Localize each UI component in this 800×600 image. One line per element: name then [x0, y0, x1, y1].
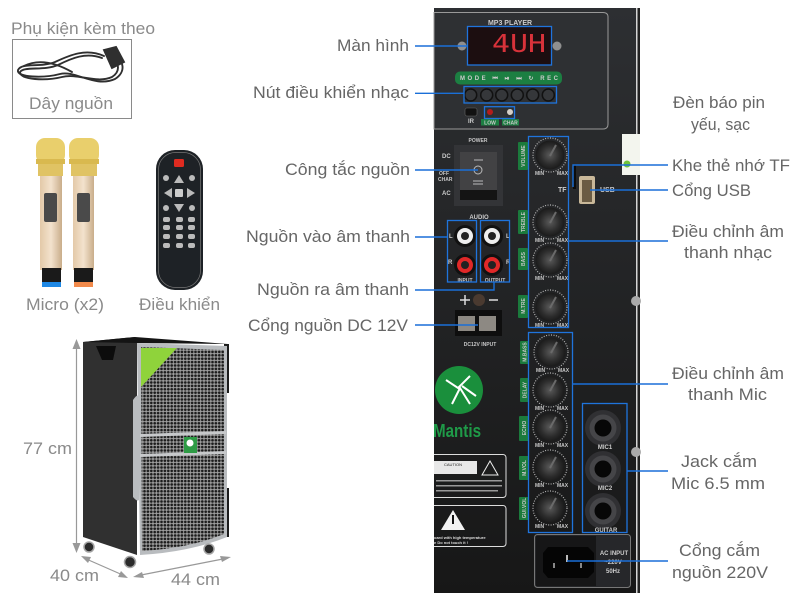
- dimension: width 44 cm: 44 cm: [171, 570, 220, 589]
- speaker front grille: [137, 343, 227, 555]
- AC input socket: [534, 534, 630, 588]
- audio jacks: INPUT: [458, 278, 472, 284]
- audio jacks: L: [506, 234, 510, 240]
- callout: audio input: Nguồn vào âm thanh: [246, 227, 410, 246]
- speaker front wings: [224, 344, 229, 537]
- audio jacks: AUDIO: [469, 215, 489, 221]
- callout: power switch: Công tắc nguồn: [285, 160, 410, 179]
- DC 12V terminal: [455, 294, 502, 348]
- LED display: 4UH: [492, 29, 546, 58]
- mode button legend: [455, 72, 562, 84]
- callout: music tone controls: Điều chỉnh âm: [672, 222, 784, 241]
- callout: mic tone controls: [572, 364, 784, 404]
- LED display: [468, 27, 551, 65]
- callout: 220V power socket: Cổng cắm: [679, 541, 760, 560]
- callout: mic tone controls: Điều chỉnh âm: [672, 364, 784, 383]
- label: microphones: Micro (x2): [26, 295, 104, 314]
- caution labels: oard with high temperature: [434, 535, 486, 540]
- power switch: AC: [442, 191, 451, 197]
- audio jacks: R: [506, 260, 511, 266]
- callout: music tone controls: [568, 222, 784, 262]
- callout: 220V power socket: nguồn 220V: [672, 563, 769, 582]
- green function tags: TREBLE: [521, 211, 527, 232]
- Mantis logo: Mantis: [433, 421, 481, 441]
- dimension: height 77 cm: 77 cm: [23, 439, 72, 458]
- green function tags: [518, 142, 529, 520]
- accessory box: power cord: Dây nguồn: [29, 94, 113, 113]
- callout: music tone controls: thanh nhạc: [684, 243, 773, 262]
- caution labels: CAUTION: [444, 462, 462, 467]
- callout: screen: [337, 36, 467, 55]
- callout: mic jacks: [627, 452, 765, 493]
- callout: screen: Màn hình: [337, 36, 409, 55]
- mic jacks: MIC2: [598, 486, 613, 492]
- audio jacks: R: [448, 260, 453, 266]
- caution labels: e Do not touch it !: [434, 540, 468, 545]
- callout: music buttons: Nút điều khiển nhạc: [253, 83, 410, 102]
- music buttons: [465, 89, 554, 101]
- power switch: OFF: [439, 171, 449, 177]
- callout: mic jacks: Mic 6.5 mm: [671, 474, 765, 493]
- music knobs: [533, 138, 569, 329]
- green function tags: M.BASS: [522, 342, 528, 362]
- mic jacks: MIC1: [598, 445, 613, 451]
- status LEDs: CHAR: [503, 120, 518, 126]
- dimension: depth 40 cm: [50, 556, 128, 585]
- green function tags: ECHO: [522, 421, 528, 435]
- callout: TF slot: [573, 156, 790, 187]
- IR sensor: [465, 108, 477, 125]
- dimension: depth 40 cm: 40 cm: [50, 566, 99, 585]
- TF and USB slots: TF: [558, 187, 567, 194]
- status LEDs: [481, 109, 519, 126]
- dimension: height 77 cm: [23, 339, 80, 553]
- green function tags: DELAY: [522, 381, 528, 398]
- caution labels: [430, 454, 506, 546]
- DC 12V terminal: DC12V INPUT: [464, 342, 496, 348]
- MP3 player module: MP3 PLAYER: [488, 20, 532, 27]
- green sticker: [141, 348, 177, 387]
- green function tags: GUI.VOL: [522, 498, 528, 518]
- speaker top: [83, 337, 228, 344]
- status LEDs: LOW: [484, 120, 496, 126]
- dimension: width 44 cm: [133, 556, 231, 589]
- label: low battery and charging LED: Đèn báo pin: [673, 93, 765, 112]
- green function tags: M.VOL: [522, 460, 528, 476]
- green function tags: VOLUME: [521, 145, 527, 167]
- power switch: DC: [442, 154, 451, 160]
- green function tags: BASS: [521, 251, 527, 266]
- callout: mic tone controls: thanh Mic: [688, 385, 768, 404]
- blue highlight boxes: [448, 26, 627, 532]
- label: remote: Điều khiển: [139, 295, 220, 314]
- speaker handle: [96, 346, 116, 360]
- MP3 player module: [434, 12, 608, 129]
- speaker product image: [83, 337, 229, 568]
- callout: audio output: Nguồn ra âm thanh: [257, 280, 409, 299]
- mode button legend: MODE ⏮ ⏯ ⏭ ↻ REC: [460, 76, 559, 82]
- mic jacks: [585, 410, 621, 534]
- accessories heading: Phụ kiện kèm theo: [11, 19, 155, 38]
- icon: power cord: [18, 47, 124, 82]
- audio jacks: OUTPUT: [485, 278, 505, 284]
- speaker wheels: [84, 542, 214, 568]
- TF and USB slots: [558, 165, 615, 204]
- callout: USB port: Cổng USB: [672, 181, 751, 200]
- power switch: CHAR: [438, 177, 453, 183]
- callout: audio output: [257, 280, 494, 299]
- green function tags: M.TRE: [521, 298, 527, 314]
- IR sensor: IR: [468, 119, 475, 125]
- Mantis logo: [433, 366, 483, 441]
- icon: remote control: [156, 150, 203, 290]
- callout: TF slot: Khe thẻ nhớ TF: [672, 156, 790, 175]
- callout: mic jacks: Jack cắm: [681, 452, 757, 471]
- AC input socket: AC INPUT: [600, 551, 628, 557]
- panel: rear control board: [430, 8, 641, 593]
- audio jacks: [448, 215, 511, 284]
- AC input socket: 50Hz: [606, 569, 620, 575]
- power switch: [438, 138, 503, 206]
- icon: wireless microphones: [36, 138, 99, 287]
- power switch: POWER: [469, 138, 488, 144]
- speaker side panel: [83, 337, 137, 555]
- callout: DC 12V: Cổng nguồn DC 12V: [248, 316, 409, 335]
- label: low battery and charging LED: yếu, sạc: [691, 115, 750, 134]
- mic knobs: [533, 335, 570, 530]
- screws: [631, 296, 641, 457]
- TF and USB slots: USB: [600, 187, 615, 194]
- callout: 220V power socket: [567, 541, 769, 582]
- mic jacks: GUITAR: [595, 528, 618, 534]
- AC input socket: ~220V: [604, 560, 622, 566]
- label: low battery and charging LED: [673, 93, 765, 134]
- accessory box: power cord: [12, 40, 132, 118]
- sticker: [622, 134, 640, 175]
- speaker logo: [184, 437, 197, 453]
- audio jacks: L: [449, 234, 453, 240]
